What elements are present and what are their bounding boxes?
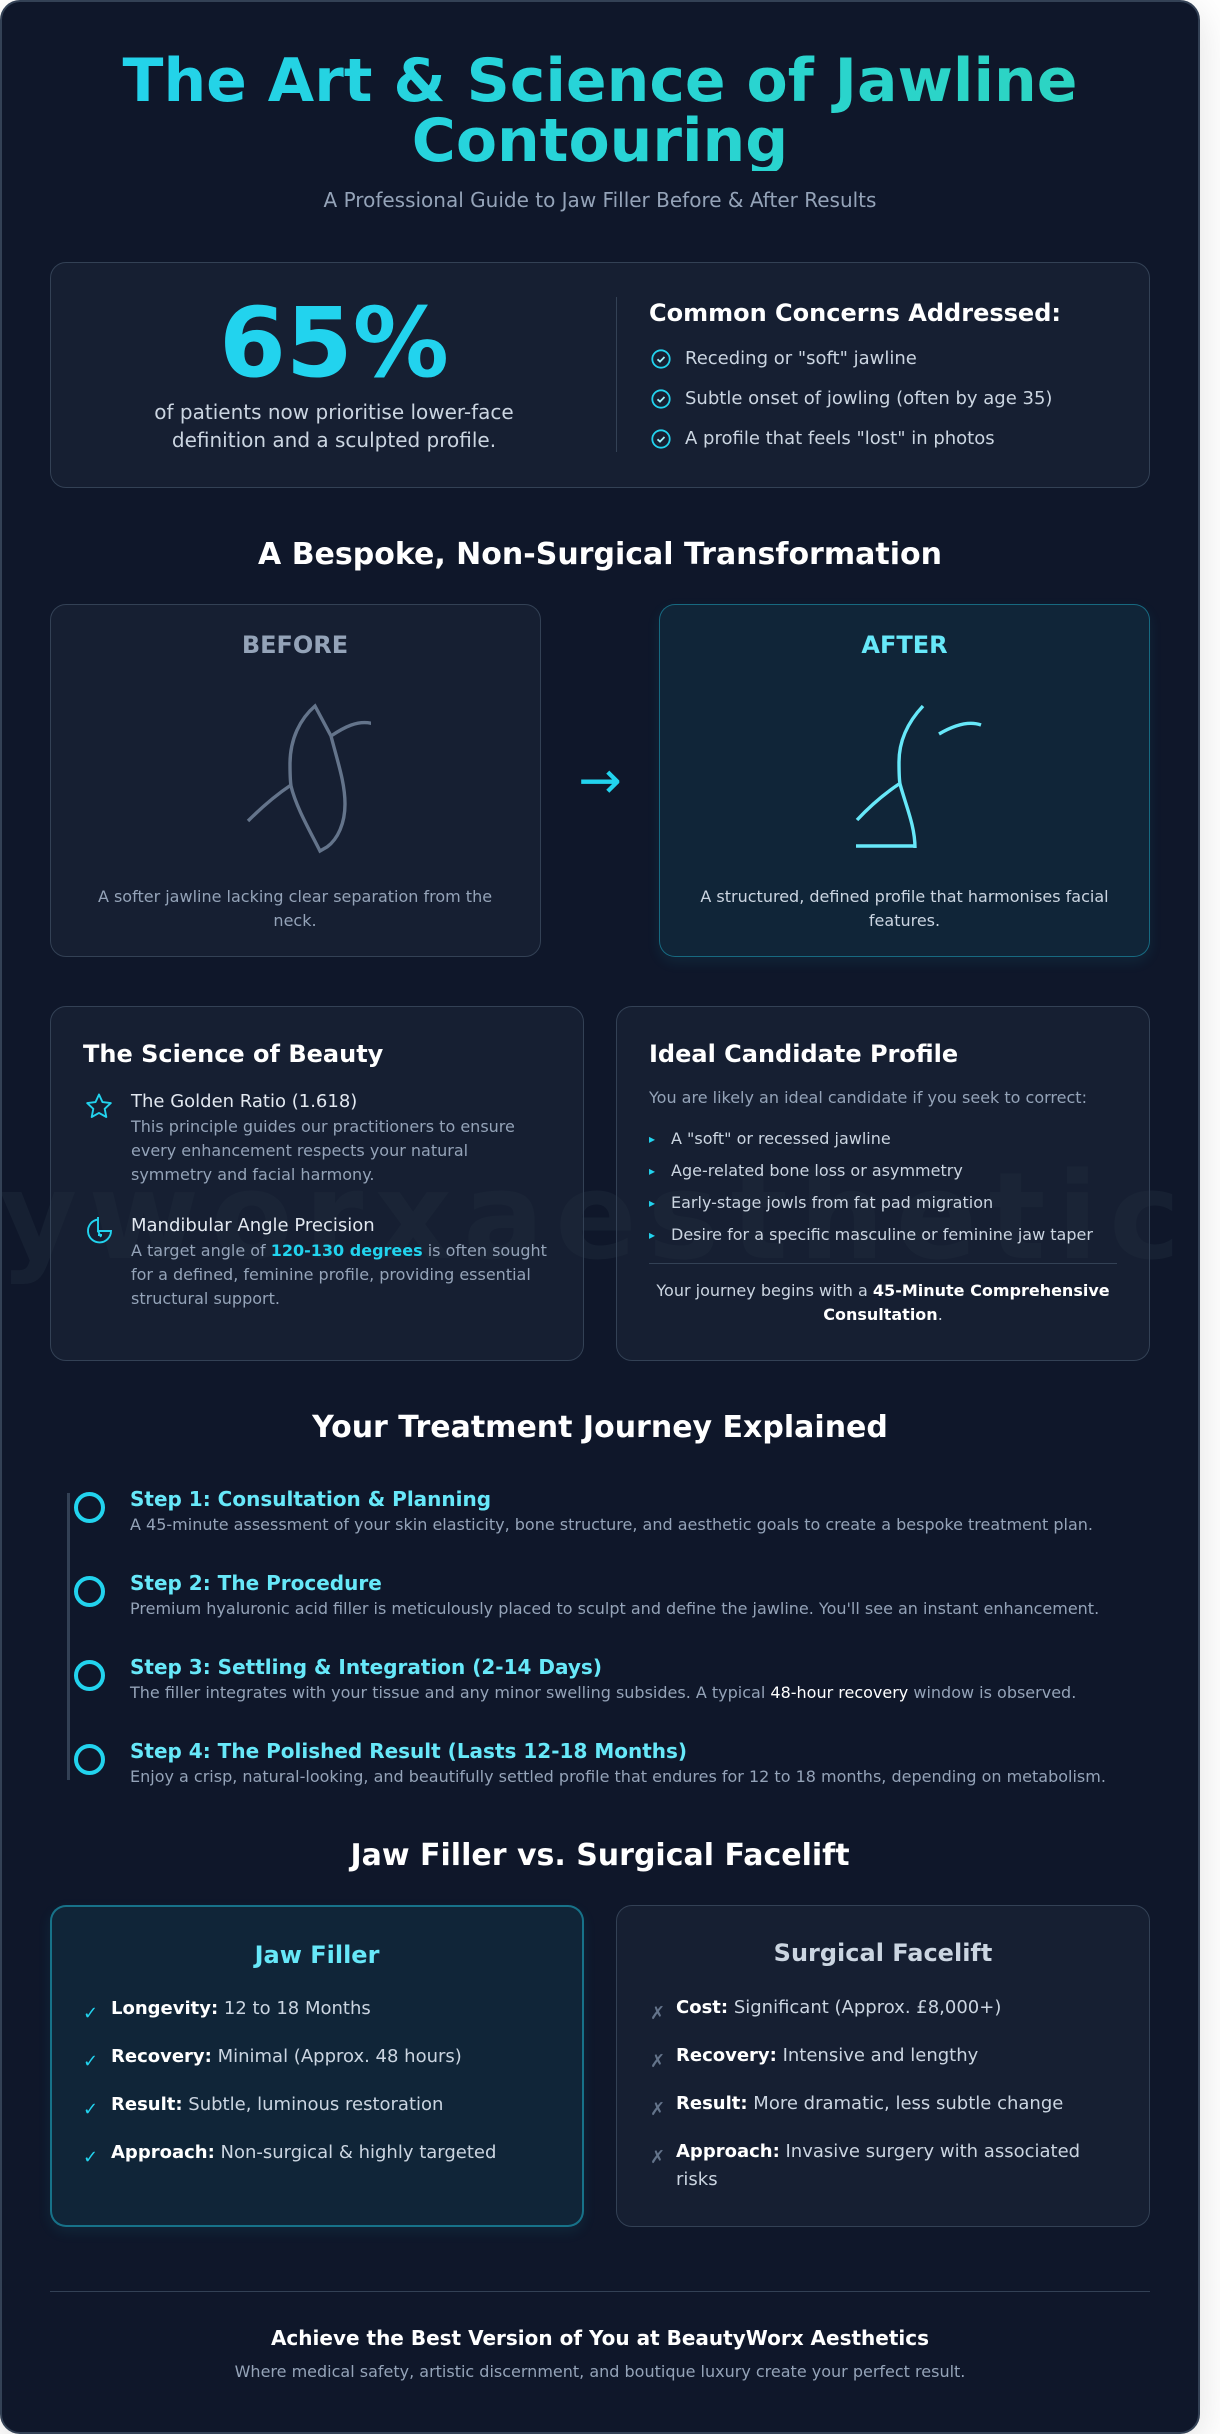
after caption: features. — [869, 911, 940, 930]
feature list: Approach: Non-surgical & highly targeted — [111, 2142, 496, 2163]
feature list: Approach: Invasive surgery with associated — [676, 2141, 1080, 2162]
candidate list: ▸ — [649, 1132, 655, 1146]
timeline — [67, 1487, 1106, 1786]
panel: jaw filler — [50, 1905, 584, 2227]
step 1 — [74, 1487, 1093, 1534]
step 2: Premium hyaluronic acid filler is meticulously placed to sculpt and define the jawline. You'll see an instant enhancement. — [130, 1599, 1099, 1618]
concern 3: A profile that feels "lost" in photos — [685, 428, 995, 449]
intro text: You are likely an ideal candidate if you seek to correct: — [649, 1088, 1087, 1107]
footer — [50, 2291, 1150, 2391]
panel: hero stat and concerns — [50, 262, 1150, 488]
after caption: A structured, defined profile that harmonises facial — [700, 887, 1109, 906]
feature list — [83, 1998, 496, 2168]
candidate list: Age-related bone loss or asymmetry — [671, 1161, 963, 1180]
title: Contouring — [412, 106, 788, 176]
feature list: ✗ — [650, 2003, 665, 2024]
panel: ideal candidate — [616, 1006, 1150, 1361]
footer text: Where medical safety, artistic discernment, and boutique luxury create your perfect result. — [235, 2362, 965, 2381]
candidate list: Desire for a specific masculine or feminine jaw taper — [671, 1225, 1093, 1244]
icon: angle — [87, 1217, 112, 1244]
concerns heading: Common Concerns Addressed: — [649, 299, 1061, 327]
feature list: Cost: Significant (Approx. £8,000+) — [676, 1997, 1001, 2018]
golden ratio text — [130, 1117, 515, 1184]
before label: BEFORE — [242, 631, 348, 659]
feature list — [650, 1997, 1080, 2190]
footer heading: Achieve the Best Version of You at BeautyWorx Aesthetics — [271, 2326, 929, 2350]
panel heading: Jaw Filler — [255, 1941, 379, 1969]
icon: check circle — [651, 429, 671, 449]
heading: treatment journey: Your Treatment Journey Explained — [312, 1410, 888, 1445]
panel heading: Ideal Candidate Profile — [649, 1040, 958, 1068]
stat description: definition and a sculpted profile. — [172, 428, 496, 452]
angle text: A target angle of 120-130 degrees is often sought — [131, 1241, 547, 1260]
panel: science of beauty — [50, 1006, 584, 1361]
angle text — [131, 1241, 547, 1308]
step 4 — [74, 1739, 1106, 1786]
panel: before — [50, 604, 540, 957]
icon: soft jawline profile — [246, 704, 371, 854]
candidate list — [649, 1129, 1093, 1244]
feature list: ✓ — [83, 2099, 98, 2120]
concern 1: Receding or "soft" jawline — [685, 348, 917, 369]
feature list: Recovery: Minimal (Approx. 48 hours) — [111, 2046, 462, 2067]
after label: AFTER — [861, 631, 948, 659]
step 3: The filler integrates with your tissue and any minor swelling subsides. A typical 48-hour recovery window is observed. — [130, 1683, 1076, 1702]
candidate list: Early-stage jowls from fat pad migration — [671, 1193, 993, 1212]
feature list: ✗ — [650, 2147, 665, 2168]
stat description: of patients now prioritise lower-face — [154, 400, 514, 424]
step 3 — [74, 1655, 1076, 1702]
golden ratio text: This principle guides our practitioners to ensure — [131, 1117, 515, 1136]
feature list: risks — [676, 2169, 718, 2190]
feature list: Result: More dramatic, less subtle change — [676, 2093, 1063, 2114]
heading: transformation: A Bespoke, Non-Surgical Transformation — [258, 537, 942, 572]
candidate list: ▸ — [649, 1196, 655, 1210]
feature list: Result: Subtle, luminous restoration — [111, 2094, 443, 2115]
title — [50, 51, 1150, 171]
feature list: ✗ — [650, 2051, 665, 2072]
angle title: Mandibular Angle Precision — [131, 1215, 375, 1236]
panel: after — [659, 604, 1150, 957]
feature list: ✗ — [650, 2099, 665, 2120]
feature list: ✓ — [83, 2147, 98, 2168]
icon: check circle — [651, 389, 671, 409]
before caption: neck. — [273, 911, 317, 930]
step 3: Step 3: Settling & Integration (2-14 Days) — [130, 1655, 602, 1679]
icon: star — [86, 1094, 112, 1118]
feature list: Recovery: Intensive and lengthy — [676, 2045, 978, 2066]
candidate list: ▸ — [649, 1164, 655, 1178]
step 1: Step 1: Consultation & Planning — [130, 1487, 491, 1511]
subtitle: A Professional Guide to Jaw Filler Before & After Results — [324, 188, 876, 212]
golden ratio text: every enhancement respects your natural — [131, 1141, 468, 1160]
big stat: 65% — [219, 287, 449, 399]
step 1: A 45-minute assessment of your skin elasticity, bone structure, and aesthetic goals to create a bespoke treatment plan. — [130, 1515, 1093, 1534]
consultation note — [656, 1281, 1110, 1324]
feature list: ✓ — [83, 2003, 98, 2024]
golden ratio title: The Golden Ratio (1.618) — [131, 1091, 357, 1112]
panel heading: Surgical Facelift — [774, 1939, 992, 1967]
panel: surgical facelift — [616, 1905, 1150, 2227]
angle text: for a defined, feminine profile, providing essential — [131, 1265, 531, 1284]
concern 2: Subtle onset of jowling (often by age 35) — [685, 388, 1052, 409]
arrow: → — [578, 751, 622, 811]
stat description — [154, 400, 514, 452]
title: The Art & Science of Jawline — [123, 46, 1077, 116]
icon: defined jawline profile — [856, 704, 982, 848]
golden ratio text: symmetry and facial harmony. — [131, 1165, 374, 1184]
consultation note: Your journey begins with a 45-Minute Comprehensive — [656, 1281, 1110, 1300]
feature list: ✓ — [83, 2051, 98, 2072]
step 4: Enjoy a crisp, natural-looking, and beautifully settled profile that endures for 12 to 18 months, depending on metabolism. — [130, 1767, 1106, 1786]
step 4: Step 4: The Polished Result (Lasts 12-18 Months) — [130, 1739, 687, 1763]
before caption: A softer jawline lacking clear separation from the — [98, 887, 492, 906]
feature list: Longevity: 12 to 18 Months — [111, 1998, 371, 2019]
watermark: yworxaesthetic — [0, 1148, 1192, 1287]
icon: check circle — [651, 349, 671, 369]
step 2: Step 2: The Procedure — [130, 1571, 382, 1595]
step 2 — [74, 1571, 1099, 1618]
after caption — [700, 887, 1109, 930]
consultation note: Consultation. — [823, 1305, 943, 1324]
candidate list: ▸ — [649, 1228, 655, 1242]
candidate list: A "soft" or recessed jawline — [671, 1129, 891, 1148]
heading: comparison: Jaw Filler vs. Surgical Facelift — [350, 1838, 850, 1873]
before caption — [98, 887, 492, 930]
panel heading: The Science of Beauty — [83, 1040, 383, 1068]
angle text: structural support. — [131, 1289, 280, 1308]
